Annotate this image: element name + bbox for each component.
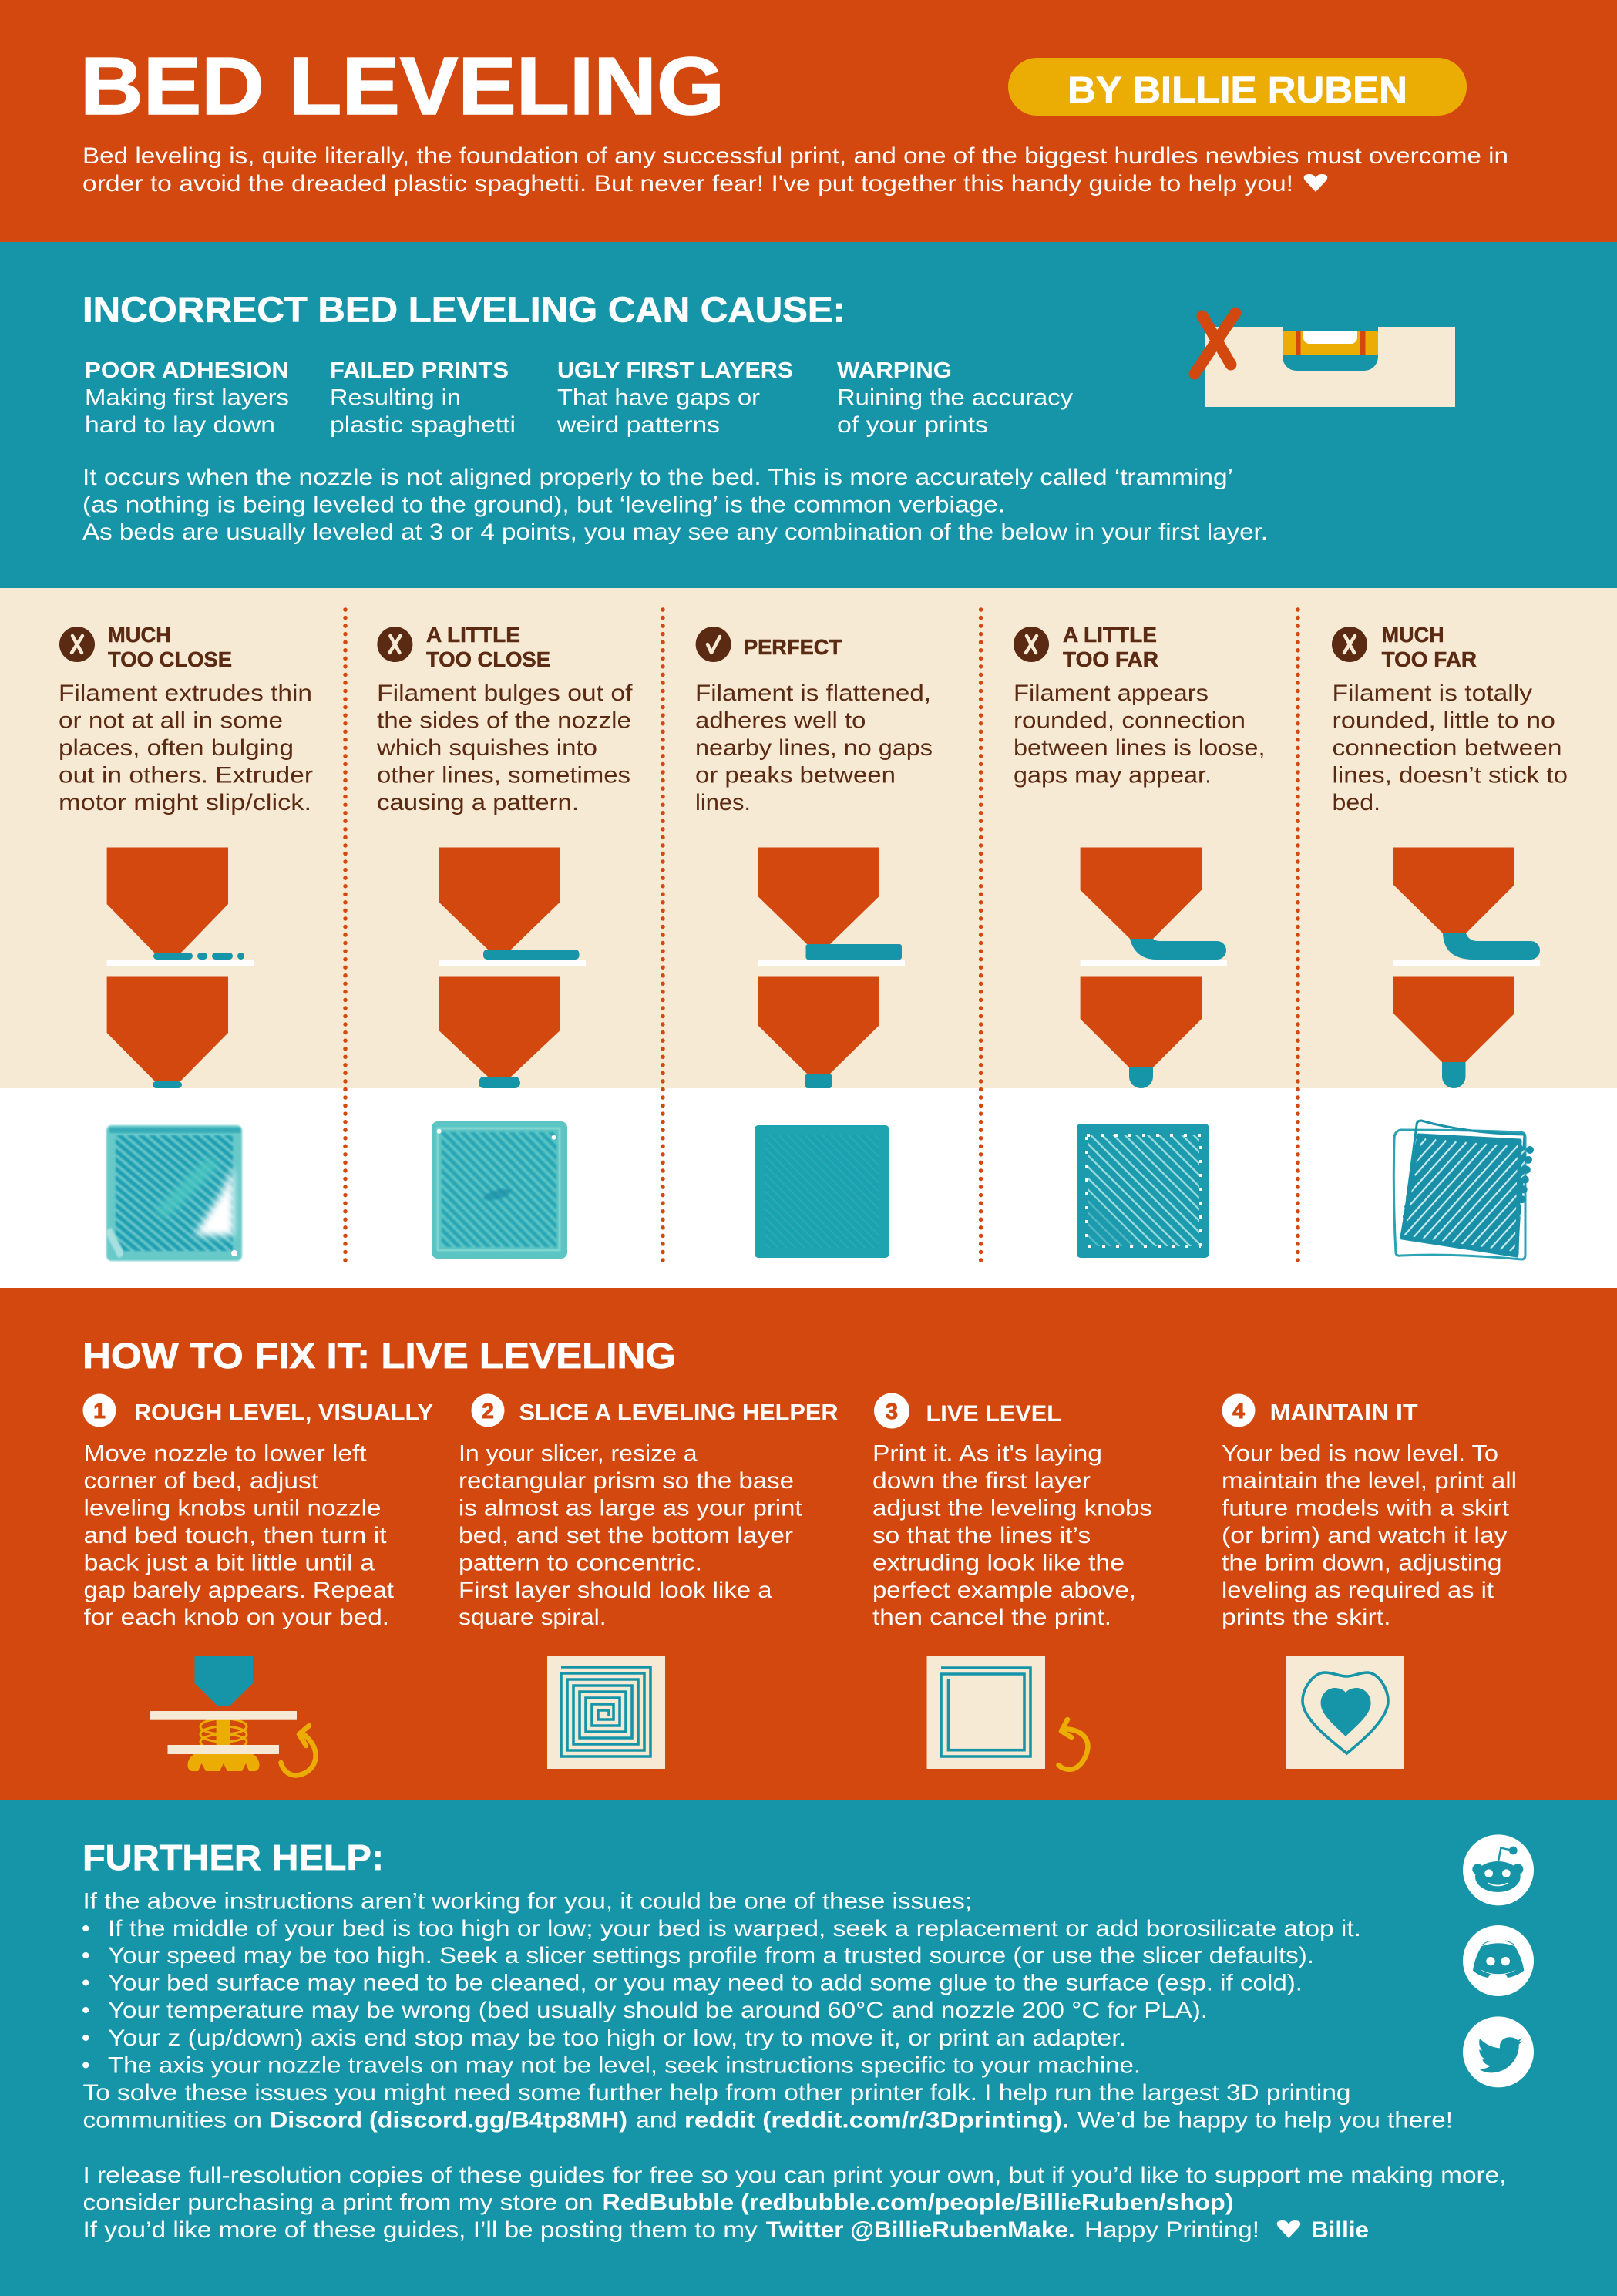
- step text: (or brim) and watch it lay: [1222, 1523, 1508, 1548]
- step text: square spiral.: [459, 1605, 607, 1630]
- intro text: order to avoid the dreaded plastic spaghetti. But never fear! I've put together this handy guide to help you!: [82, 171, 1293, 197]
- nozzle diagram: side and front: [439, 848, 586, 1088]
- print photo: a little too far: [1077, 1124, 1209, 1258]
- support text: RedBubble (redbubble.com/people/BillieRuben/shop): [603, 2190, 1233, 2215]
- nozzle diagram: side and front: [1081, 848, 1227, 1088]
- status icon: cross: [1014, 627, 1049, 662]
- arrow: adjust knob: [1059, 1719, 1088, 1770]
- step 3: live level: [872, 1393, 1152, 1770]
- step number 2: [472, 1393, 504, 1427]
- step heading: ROUGH LEVEL, VISUALLY: [134, 1400, 433, 1426]
- issue list: •: [82, 2052, 90, 2078]
- intro text: Bed leveling is, quite literally, the foundation of any successful print, and one of the biggest hurdles newbies must overcome in: [82, 143, 1508, 169]
- column heading: A LITTLE: [426, 623, 520, 647]
- step text: bed, and set the bottom layer: [459, 1523, 793, 1548]
- icon: reddit: [1463, 1834, 1534, 1905]
- description: Filament bulges out of: [377, 681, 633, 706]
- description: Filament extrudes thin: [59, 681, 312, 706]
- column: much too far: [1332, 623, 1568, 1259]
- cause: failed prints: plastic spaghetti: [330, 412, 516, 438]
- description: rounded, little to no: [1332, 708, 1555, 734]
- step text: [459, 1440, 802, 1630]
- nozzle diagram: side and front: [1393, 848, 1540, 1088]
- support text: [83, 2163, 1506, 2243]
- cause: warping: Ruining the accuracy: [837, 385, 1073, 410]
- illustration: concentric outline: [926, 1656, 1088, 1770]
- author pill: [1008, 58, 1467, 116]
- illustration: square spiral: [547, 1656, 665, 1769]
- step number 4: 4: [1232, 1399, 1245, 1423]
- step text: In your slicer, resize a: [459, 1440, 698, 1466]
- icon: crossed-out spirit level: [1195, 313, 1455, 407]
- explanation text: [82, 465, 1268, 545]
- step text: First layer should look like a: [459, 1578, 772, 1603]
- step text: back just a bit little until a: [83, 1550, 375, 1575]
- community text: reddit (reddit.com/r/3Dprinting).: [684, 2107, 1069, 2133]
- step number 3: 3: [886, 1400, 898, 1424]
- step text: gap barely appears. Repeat: [83, 1578, 395, 1603]
- status icon: cross: [59, 627, 95, 662]
- step text: [83, 1440, 395, 1630]
- step number 1: 1: [93, 1399, 106, 1423]
- issue list: Your temperature may be wrong (bed usually should be around 60°C and nozzle 200 °C for PLA).: [108, 1998, 1208, 2023]
- description: Filament is flattened,: [695, 681, 931, 706]
- panel: how to fix it: [0, 1288, 1617, 1800]
- panel: further help: [0, 1800, 1617, 2296]
- support text: I release full-resolution copies of these guides for free so you can print your own, but if you’d like to support me making more,: [83, 2163, 1506, 2188]
- step text: and bed touch, then turn it: [83, 1523, 387, 1548]
- issue list: •: [82, 2025, 90, 2051]
- status icon: cross: [1332, 627, 1367, 662]
- support text: If you’d like more of these guides, I’ll be posting them to my: [83, 2217, 758, 2243]
- description: Filament is totally: [1332, 681, 1532, 706]
- heading: further help: FURTHER HELP:: [82, 1837, 384, 1877]
- step text: rectangular prism so the base: [459, 1468, 794, 1494]
- description: other lines, sometimes: [377, 763, 630, 788]
- step number 4: [1222, 1393, 1255, 1427]
- community text: communities on: [83, 2107, 262, 2133]
- column heading: [1382, 623, 1477, 671]
- community text: [83, 2080, 1453, 2133]
- step text: down the first layer: [872, 1468, 1091, 1494]
- column: a little too close: [376, 623, 633, 1259]
- step text: leveling knobs until nozzle: [83, 1495, 381, 1521]
- step text: Your bed is now level. To: [1222, 1440, 1498, 1466]
- step text: so that the lines it’s: [872, 1523, 1091, 1548]
- issue list: [82, 1888, 1361, 2078]
- step text: [872, 1440, 1152, 1630]
- column heading: [1063, 623, 1158, 671]
- panel: five first layer examples: [0, 588, 1617, 1288]
- description: adheres well to: [695, 708, 866, 734]
- community text: To solve these issues you might need some further help from other printer folk. I help run the largest 3D printing: [83, 2080, 1350, 2106]
- step text: Move nozzle to lower left: [83, 1440, 367, 1466]
- nozzle diagram: side and front: [758, 848, 905, 1088]
- community text: Discord (discord.gg/B4tp8MH): [270, 2107, 627, 2133]
- step 2: slice helper: [459, 1393, 839, 1769]
- panel: incorrect bed leveling causes: [0, 242, 1617, 588]
- community text: We’d be happy to help you there!: [1077, 2107, 1453, 2133]
- explanation text: As beds are usually leveled at 3 or 4 points, you may see any combination of the below in your first layer.: [82, 519, 1268, 545]
- description: [695, 681, 933, 815]
- description: gaps may appear.: [1014, 763, 1212, 788]
- cause: poor adhesion: hard to lay down: [85, 412, 275, 438]
- description: rounded, connection: [1014, 708, 1246, 734]
- step text: future models with a skirt: [1222, 1495, 1510, 1521]
- description: [376, 681, 633, 815]
- explanation text: It occurs when the nozzle is not aligned properly to the bed. This is more accurately called ‘tramming’: [82, 465, 1233, 490]
- explanation text: (as nothing is being leveled to the ground), but ‘leveling’ is the common verbiage.: [82, 492, 1005, 518]
- issue list: •: [82, 1916, 90, 1941]
- cause: poor adhesion: POOR ADHESION: [85, 358, 289, 383]
- step text: maintain the level, print all: [1222, 1468, 1517, 1494]
- column heading: MUCH: [1382, 623, 1444, 647]
- status icon: cross: [377, 627, 412, 662]
- support text: consider purchasing a print from my store on: [83, 2190, 593, 2215]
- print photo: perfect: [755, 1125, 889, 1258]
- print photo: much too far: [1393, 1121, 1530, 1259]
- column heading: MUCH: [108, 623, 171, 647]
- column heading: A LITTLE: [1063, 623, 1157, 647]
- step text: extruding look like the: [872, 1550, 1125, 1575]
- issue list: Your z (up/down) axis end stop may be too high or low, try to move it, or print an adapter.: [108, 2025, 1126, 2051]
- column: a little too far: [1014, 623, 1266, 1258]
- column heading: TOO CLOSE: [108, 647, 232, 671]
- description: causing a pattern.: [377, 790, 579, 815]
- description: the sides of the nozzle: [377, 708, 631, 734]
- issue list: Your speed may be too high. Seek a slicer settings profile from a trusted source (or use the slicer defaults).: [108, 1943, 1314, 1968]
- support text: Twitter @BillieRubenMake.: [766, 2217, 1075, 2243]
- description: lines.: [695, 790, 751, 815]
- step text: perfect example above,: [872, 1578, 1136, 1603]
- description: out in others. Extruder: [59, 763, 313, 788]
- description: lines, doesn’t stick to: [1332, 763, 1568, 788]
- step text: leveling as required as it: [1222, 1578, 1494, 1603]
- step text: adjust the leveling knobs: [872, 1495, 1152, 1521]
- icon: twitter: [1463, 2016, 1534, 2087]
- cause: warping: [837, 358, 1073, 438]
- issue list: Your bed surface may need to be cleaned, or you may need to add some glue to the surface (esp. if cold).: [108, 1970, 1303, 1995]
- description: motor might slip/click.: [59, 790, 311, 815]
- illustration: heart with skirt: [1286, 1656, 1404, 1769]
- issue list: If the above instructions aren’t working for you, it could be one of these issues;: [83, 1888, 972, 1914]
- cause: ugly first layers: [556, 358, 793, 438]
- step number 1: [83, 1393, 116, 1427]
- arrow: turn knob: [281, 1726, 316, 1775]
- column heading: TOO FAR: [1382, 647, 1477, 671]
- community text: and: [636, 2107, 677, 2133]
- description: places, often bulging: [59, 735, 294, 761]
- cause: warping: WARPING: [837, 358, 952, 383]
- description: [1332, 681, 1568, 815]
- description: [59, 681, 313, 815]
- description: bed.: [1332, 790, 1380, 815]
- step text: [1222, 1440, 1517, 1630]
- description: or not at all in some: [59, 708, 283, 734]
- cause: failed prints: [330, 358, 516, 438]
- description: or peaks between: [695, 763, 896, 788]
- description: connection between: [1332, 735, 1562, 761]
- step number 2: 2: [482, 1399, 494, 1423]
- column heading: PERFECT: [744, 635, 842, 659]
- support text: Happy Printing!: [1084, 2217, 1259, 2243]
- column heading: TOO CLOSE: [426, 647, 550, 671]
- print photo: a little too close: [432, 1121, 567, 1259]
- cause: ugly first layers: That have gaps or: [557, 385, 760, 410]
- cause: poor adhesion: [85, 358, 289, 438]
- step text: then cancel the print.: [872, 1605, 1111, 1630]
- cause: ugly first layers: UGLY FIRST LAYERS: [557, 358, 793, 383]
- step 4: maintain it: [1222, 1393, 1517, 1769]
- description: [1014, 681, 1266, 788]
- panel: header: [0, 0, 1617, 242]
- issue list: •: [82, 1970, 90, 1995]
- nozzle diagram: side and front: [107, 848, 254, 1088]
- step heading: SLICE A LEVELING HELPER: [519, 1400, 839, 1426]
- heading: causes: INCORRECT BED LEVELING CAN CAUSE:: [82, 290, 845, 330]
- cause: failed prints: FAILED PRINTS: [330, 358, 509, 383]
- illustration: nozzle, bed and knob: [150, 1656, 316, 1775]
- description: which squishes into: [376, 735, 597, 761]
- step text: Print it. As it's laying: [872, 1440, 1102, 1466]
- description: nearby lines, no gaps: [695, 735, 933, 761]
- step text: pattern to concentric.: [459, 1550, 702, 1575]
- cause: failed prints: Resulting in: [330, 385, 461, 410]
- icon: heart signature: [1277, 2220, 1300, 2238]
- issue list: The axis your nozzle travels on may not be level, seek instructions specific to your machine.: [108, 2052, 1141, 2078]
- description: Filament appears: [1014, 681, 1209, 706]
- print photo: much too close: [106, 1125, 242, 1261]
- support text: Billie: [1311, 2217, 1369, 2243]
- step 1: rough level: [83, 1393, 433, 1775]
- issue list: •: [82, 1943, 90, 1968]
- step text: the brim down, adjusting: [1222, 1550, 1502, 1575]
- heading: live leveling: HOW TO FIX IT: LIVE LEVELING: [82, 1336, 676, 1376]
- intro text: [82, 143, 1508, 197]
- author pill: BY BILLIE RUBEN: [1067, 70, 1407, 111]
- column heading: [426, 623, 550, 671]
- cause: poor adhesion: Making first layers: [85, 385, 289, 410]
- step number 3: [874, 1393, 909, 1429]
- step text: is almost as large as your print: [459, 1495, 802, 1521]
- cause: ugly first layers: weird patterns: [556, 412, 720, 438]
- description: between lines is loose,: [1014, 735, 1266, 761]
- step heading: LIVE LEVEL: [926, 1401, 1061, 1427]
- step heading: MAINTAIN IT: [1270, 1400, 1418, 1426]
- column heading: TOO FAR: [1063, 647, 1158, 671]
- step text: prints the skirt.: [1222, 1605, 1390, 1630]
- icon: heart: [1304, 174, 1327, 192]
- issue list: •: [82, 1998, 90, 2023]
- column: much too close: [59, 623, 313, 1261]
- cause: warping: of your prints: [837, 412, 988, 438]
- column heading: [108, 623, 232, 671]
- step text: corner of bed, adjust: [83, 1468, 319, 1494]
- title: BED LEVELING: [80, 41, 724, 132]
- icon: discord: [1463, 1925, 1534, 1996]
- issue list: If the middle of your bed is too high or low; your bed is warped, seek a replacement or add borosilicate atop it.: [108, 1916, 1361, 1941]
- step text: for each knob on your bed.: [83, 1605, 389, 1630]
- status icon: check: [696, 627, 731, 662]
- column: perfect: [695, 627, 933, 1258]
